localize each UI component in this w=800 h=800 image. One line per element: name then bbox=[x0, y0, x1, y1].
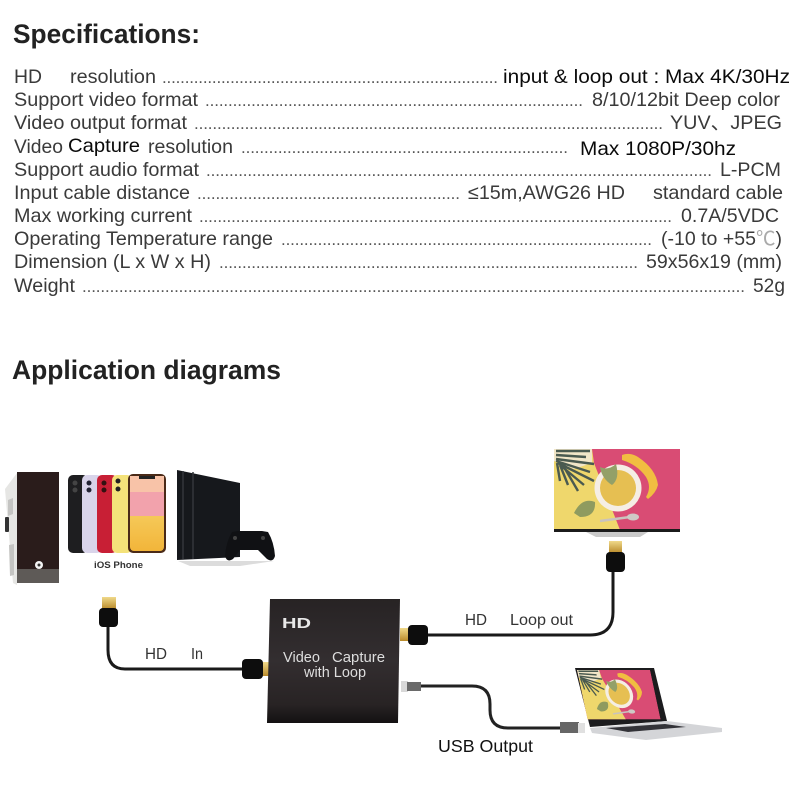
logo: HD: HD bbox=[282, 616, 311, 632]
row: Weight: 52g bbox=[753, 275, 785, 297]
icon: iOS phones bbox=[68, 474, 166, 553]
row: Support audio format bbox=[14, 159, 781, 181]
row: Video Capture resolution: ....................................................................... bbox=[241, 138, 568, 157]
row: Max working current: ....................................................................................................... bbox=[199, 207, 672, 226]
row: HD resolution: resolution bbox=[70, 66, 156, 88]
label: HD Loop out: Loop out bbox=[510, 612, 574, 629]
row: Input cable distance: ......................................................... bbox=[197, 184, 460, 203]
row: HD resolution: HD bbox=[14, 66, 42, 88]
row: Video output format: Video output format bbox=[14, 112, 188, 134]
row: Dimension: Dimension (L x W x H) bbox=[14, 251, 211, 273]
device label bbox=[283, 649, 385, 681]
row: Support audio format: .............................................................................................................. bbox=[206, 161, 712, 180]
row: Video Capture resolution: resolution bbox=[148, 136, 233, 158]
row: Input cable distance: standard cable bbox=[653, 182, 783, 204]
row: Max working current bbox=[14, 205, 779, 227]
capture device bbox=[267, 599, 400, 723]
row: Input cable distance bbox=[14, 182, 783, 204]
device label: Video bbox=[283, 649, 320, 666]
row: Video Capture resolution: Video bbox=[14, 136, 63, 158]
row: Video output format: ...................................................................................................... bbox=[194, 114, 663, 133]
row: Support video format bbox=[14, 89, 781, 111]
row: Input cable distance: ≤15m,AWG26 HD bbox=[468, 182, 625, 204]
row: Operating Temperature range: ................................................................................. bbox=[281, 230, 652, 249]
row: Dimension: ........................................................................................... bbox=[219, 253, 638, 272]
label: HD Loop out bbox=[465, 612, 574, 629]
heading: Application diagrams: Application diagrams bbox=[12, 355, 281, 385]
cable: HD Loop out bbox=[400, 541, 625, 645]
row: Video Capture resolution: Capture bbox=[68, 135, 140, 157]
row: Support video format: Support video format bbox=[14, 89, 199, 111]
device label: with Loop bbox=[303, 664, 366, 681]
label: HD In: HD bbox=[145, 646, 167, 663]
cable: USB Output bbox=[401, 681, 585, 733]
row: Dimension bbox=[14, 251, 782, 273]
icon: television bbox=[554, 449, 680, 537]
row: Video output format: YUV、JPEG bbox=[670, 112, 782, 134]
label: HD In bbox=[145, 646, 203, 663]
row: Support audio format: Support audio format bbox=[14, 159, 200, 181]
row: HD resolution bbox=[14, 66, 790, 88]
row: Operating Temperature range: Operating Temperature range bbox=[14, 228, 273, 250]
cable: HD In bbox=[99, 597, 269, 679]
row: Input cable distance: Input cable distance bbox=[14, 182, 190, 204]
row: Operating Temperature range: (-10 to +55℃) bbox=[661, 228, 782, 250]
icon: laptop bbox=[575, 668, 722, 740]
label: USB Output: USB Output bbox=[438, 736, 533, 756]
row: Dimension: 59x56x19 (mm) bbox=[646, 251, 782, 273]
specification list bbox=[14, 66, 790, 297]
row: Operating Temperature range bbox=[14, 228, 782, 250]
device label: Capture bbox=[332, 649, 385, 666]
row: Video Capture resolution: Max 1080P/30hz bbox=[580, 138, 736, 160]
row: Max working current: 0.7A/5VDC bbox=[681, 205, 779, 227]
label: HD In: In bbox=[191, 646, 203, 663]
label: HD Loop out: HD bbox=[465, 612, 487, 629]
row: Support video format: 8/10/12bit Deep color bbox=[592, 89, 781, 111]
caption: iOS Phone: iOS Phone bbox=[94, 560, 143, 571]
row: Weight: Weight bbox=[14, 275, 76, 297]
row: Max working current: Max working current bbox=[14, 205, 193, 227]
row: Support audio format: L-PCM bbox=[720, 159, 781, 181]
row: HD resolution: .......................................................................... bbox=[162, 68, 498, 87]
row: Support video format: .................................................................................. bbox=[205, 91, 583, 110]
row: Weight: ................................................................................................................................................ bbox=[82, 277, 745, 296]
heading: Specifications: Specifications: bbox=[13, 19, 200, 49]
icon: desktop tower PC bbox=[5, 472, 59, 585]
row: HD resolution: input & loop out : Max 4K/30Hz bbox=[503, 66, 790, 88]
icon: game console and controller bbox=[177, 470, 275, 566]
row: Video Capture resolution bbox=[14, 135, 736, 160]
row: Video output format bbox=[14, 112, 782, 134]
